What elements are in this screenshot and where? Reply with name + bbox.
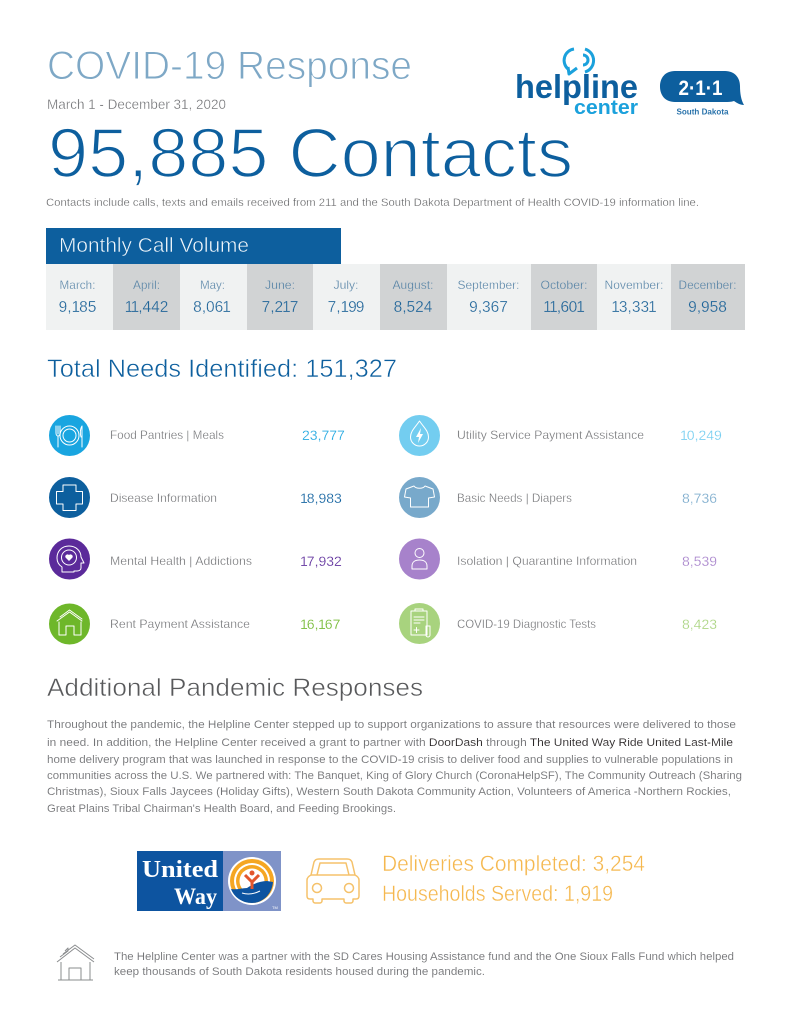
paragraph: pandemic response description: communities across the U.S. We partnered with: The Banquet, King of Glory Church (CoronaHelpSF), The Community Outreach (Sharing <box>47 770 742 782</box>
logo: helpline center: center <box>574 97 638 119</box>
need: food pantries: 23,777 <box>302 427 345 443</box>
need: utility service: Utility Service Payment Assistance <box>457 428 644 442</box>
month: July <box>328 278 364 316</box>
icon: house <box>49 604 90 644</box>
month: December: December: <box>678 278 736 292</box>
month: November: November: <box>604 278 664 292</box>
month: June: 7,217 <box>262 299 298 316</box>
month: September: 9,367 <box>469 299 508 316</box>
month: May: May: <box>200 278 225 292</box>
need: disease information: Disease Information <box>110 491 217 505</box>
month: August: August: <box>392 278 434 292</box>
logo: United Way <box>137 851 281 911</box>
housing assistance note: keep thousands of South Dakota residents housed during the pandemic. <box>114 966 485 978</box>
need: mental health: Mental Health | Addictions <box>110 554 252 568</box>
need: utility service <box>399 415 722 456</box>
need: rent payment <box>49 604 341 644</box>
paragraph: pandemic response description: home delivery program that was launched in response to the COVID-19 crisis to deliver food and supplies to vulnerable populations in <box>47 754 733 766</box>
logo: 2-1-1 South Dakota: South Dakota <box>676 106 729 116</box>
month: October: 11,601 <box>543 299 585 316</box>
need: mental health <box>49 538 342 580</box>
table backgrounds <box>46 264 745 330</box>
logo: helpline center <box>515 49 638 119</box>
heading text: Monthly Call Volume <box>59 235 249 257</box>
logo: United Way: Way <box>174 884 217 909</box>
need: disease information <box>49 477 342 518</box>
panel: monthly call volume <box>46 228 745 330</box>
icon: car <box>307 859 359 903</box>
month: December: 9,958 <box>688 299 727 316</box>
logo: United Way: United <box>142 857 219 883</box>
icon: t-shirt <box>399 477 440 518</box>
month: December <box>678 278 736 316</box>
need: diagnostic tests: COVID-19 Diagnostic Tests <box>457 617 596 631</box>
need: basic needs <box>399 477 717 518</box>
heading band <box>46 228 341 264</box>
logo: United Way: TM <box>272 905 278 910</box>
need: isolation: Isolation | Quarantine Information <box>457 554 637 568</box>
need: food pantries <box>49 415 345 456</box>
headline: total contacts: 95,885 Contacts <box>48 114 573 192</box>
need: mental health: 17,932 <box>300 553 342 569</box>
month: September <box>458 278 520 316</box>
header title: COVID-19 Response <box>47 44 412 88</box>
paragraph: pandemic response description: Christmas), Sioux Falls Jaycees (Holiday Gifts), Western South Dakota Community Action, Volunteers of America -Northern Rockies, <box>47 786 731 798</box>
month: April <box>125 278 168 316</box>
heading: total needs: Total Needs Identified: 151,327 <box>47 355 397 383</box>
icon: speech bubble <box>564 49 594 74</box>
contacts note: Contacts include calls, texts and emails received from 211 and the South Dakota Department of Health COVID-19 information line. <box>46 197 699 209</box>
paragraph: pandemic response description <box>47 719 742 815</box>
month: October: October: <box>540 278 588 292</box>
month: September: September: <box>458 278 520 292</box>
icon: person <box>399 538 440 580</box>
need: basic needs: Basic Needs | Diapers <box>457 491 572 505</box>
need: isolation <box>399 538 717 580</box>
month: March: March: <box>60 278 96 292</box>
need: disease information: 18,983 <box>300 490 342 506</box>
month: March: 9,185 <box>59 299 96 316</box>
month: April: April: <box>133 278 160 292</box>
icon: head with heart <box>49 538 90 580</box>
date range: March 1 - December 31, 2020 <box>47 96 226 112</box>
month: August <box>392 278 434 316</box>
need: isolation: 8,539 <box>682 553 717 569</box>
need: rent payment: 16,167 <box>300 616 341 632</box>
need: diagnostic tests: 8,423 <box>682 616 717 632</box>
month: June <box>262 278 298 316</box>
month: May: 8,061 <box>193 299 231 316</box>
icon: drop with bolt <box>399 415 440 456</box>
logo: 2-1-1 South Dakota: 2·1·1 <box>678 77 723 100</box>
need: rent payment: Rent Payment Assistance <box>110 617 250 631</box>
month: July: 7,199 <box>328 299 364 316</box>
month: April: 11,442 <box>125 299 168 316</box>
month: July: July: <box>334 278 358 292</box>
icon: clipboard and test tube <box>399 603 440 644</box>
housing assistance note: The Helpline Center was a partner with the SD Cares Housing Assistance fund and the One Sioux Falls Fund which helped <box>114 951 734 963</box>
icon: plate and cutlery <box>49 415 90 456</box>
month: November <box>604 278 664 316</box>
need: food pantries: Food Pantries | Meals <box>110 428 224 442</box>
icon: medical cross <box>49 477 90 518</box>
need: diagnostic tests <box>399 603 717 644</box>
month: May <box>193 278 231 316</box>
paragraph: pandemic response description: in need. In addition, the Helpline Center received a grant to partner with DoorDash through The United Way Ride United Last-Mile <box>47 737 733 749</box>
need: utility service: 10,249 <box>680 427 722 443</box>
month: March <box>59 278 96 316</box>
month: October <box>540 278 588 316</box>
month: June: June: <box>265 278 295 292</box>
housing assistance note <box>114 951 734 978</box>
stat: deliveries completed: Deliveries Completed: 3,254 <box>382 851 645 876</box>
logo: 2-1-1 South Dakota <box>660 71 744 116</box>
month: November: 13,331 <box>611 299 657 316</box>
paragraph: pandemic response description: Great Plains Tribal Chairman's Health Board, and Feeding Brookings. <box>47 803 396 815</box>
logo: helpline center: helpline <box>515 68 638 105</box>
heading: additional pandemic responses: Additional Pandemic Responses <box>47 674 423 702</box>
need: basic needs: 8,736 <box>682 490 717 506</box>
stat: households served: Households Served: 1,919 <box>382 881 613 906</box>
paragraph: pandemic response description: Throughout the pandemic, the Helpline Center stepped up to support organizations to assure that resources were delivered to those <box>47 719 736 731</box>
month: August: 8,524 <box>394 299 433 316</box>
icon: house outline <box>57 945 94 980</box>
